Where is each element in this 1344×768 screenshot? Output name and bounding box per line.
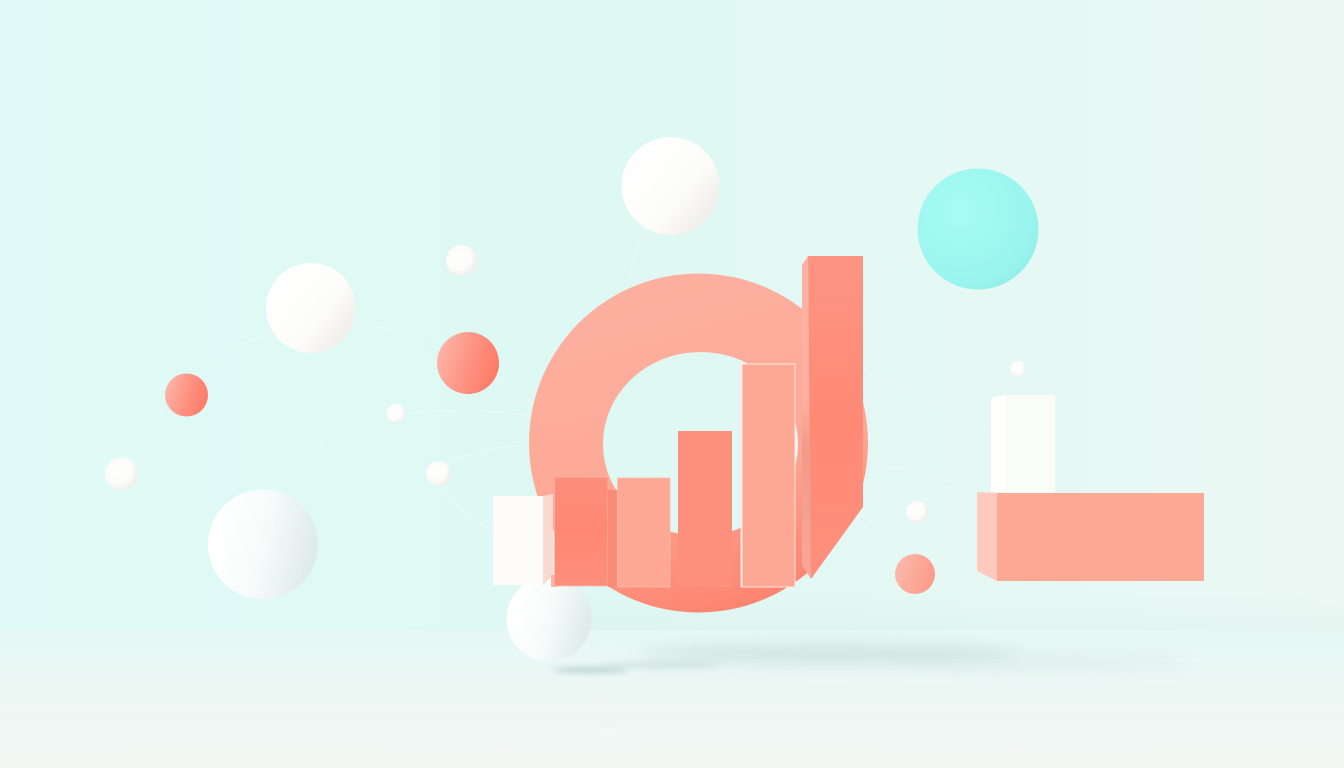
sphere: white left large (266, 263, 356, 353)
white block (991, 395, 1055, 493)
sphere: coral middle (437, 332, 499, 394)
bar: second (608, 478, 670, 587)
sphere: white lower left (208, 490, 318, 600)
coral block (977, 492, 1204, 581)
bar: tall (802, 256, 863, 579)
right block group (977, 395, 1204, 581)
bar: white block (493, 494, 553, 585)
sphere: small white right (906, 501, 928, 523)
sphere: tiny white (386, 404, 406, 423)
floor shadow (552, 645, 1190, 673)
sphere: coral left (165, 374, 208, 416)
network connection lines (128, 232, 990, 563)
sphere: small white far left (105, 458, 138, 490)
sphere: teal (918, 168, 1038, 290)
ring chart (529, 274, 868, 612)
floor (0, 630, 1344, 768)
sphere: coral right (895, 554, 935, 594)
sphere: white top (622, 137, 720, 235)
bar: first coral (551, 477, 608, 587)
sphere: small white (446, 245, 477, 276)
sphere: tiny white right (1010, 361, 1026, 377)
bar: fourth (741, 364, 795, 587)
bar chart (493, 256, 863, 587)
bar: third (678, 431, 732, 587)
sphere: white below bars (506, 576, 592, 662)
sphere: small white centre (426, 461, 451, 486)
